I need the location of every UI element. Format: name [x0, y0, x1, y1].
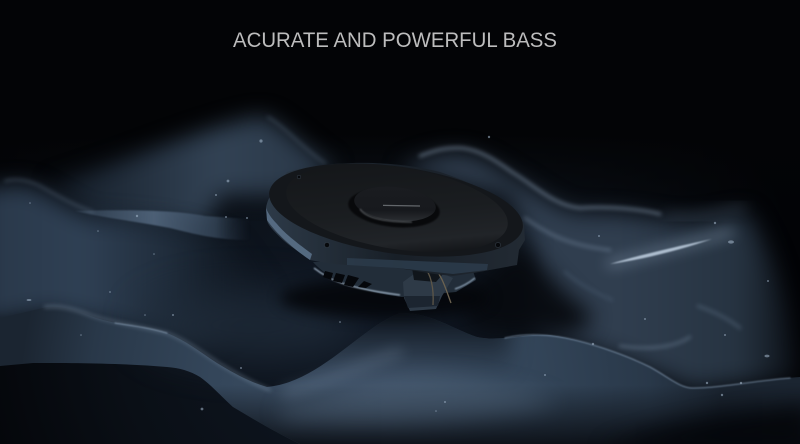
speaker: lit left rim — [266, 208, 312, 260]
smoke wave: ribbon — [75, 210, 250, 240]
crest shading under the speaker — [316, 313, 518, 370]
speaker: motor and vents — [313, 262, 476, 297]
smoke wave: right upper sheet — [400, 154, 795, 388]
speaker shadow — [280, 278, 490, 318]
particles — [27, 136, 770, 412]
bright streak — [610, 239, 712, 264]
speaker: center dust cap — [346, 183, 442, 232]
speaker — [263, 149, 529, 311]
speaker: surround — [263, 149, 529, 271]
speaker: mounting screws — [297, 175, 501, 248]
speaker: frame — [266, 163, 525, 276]
speaker: cone — [280, 150, 514, 266]
title: ACURATE AND POWERFUL BASS — [233, 28, 557, 52]
speaker: connector and wires — [403, 266, 453, 311]
smoke wave: back left sheet — [50, 116, 335, 225]
smoke wave: bright crests — [5, 117, 790, 392]
smoke wave: left body — [0, 185, 280, 345]
smoke wave: dark hole right of speaker — [460, 245, 592, 335]
smoke wave: central haze — [140, 289, 360, 361]
smoke wave: big lower sheet — [0, 300, 800, 444]
